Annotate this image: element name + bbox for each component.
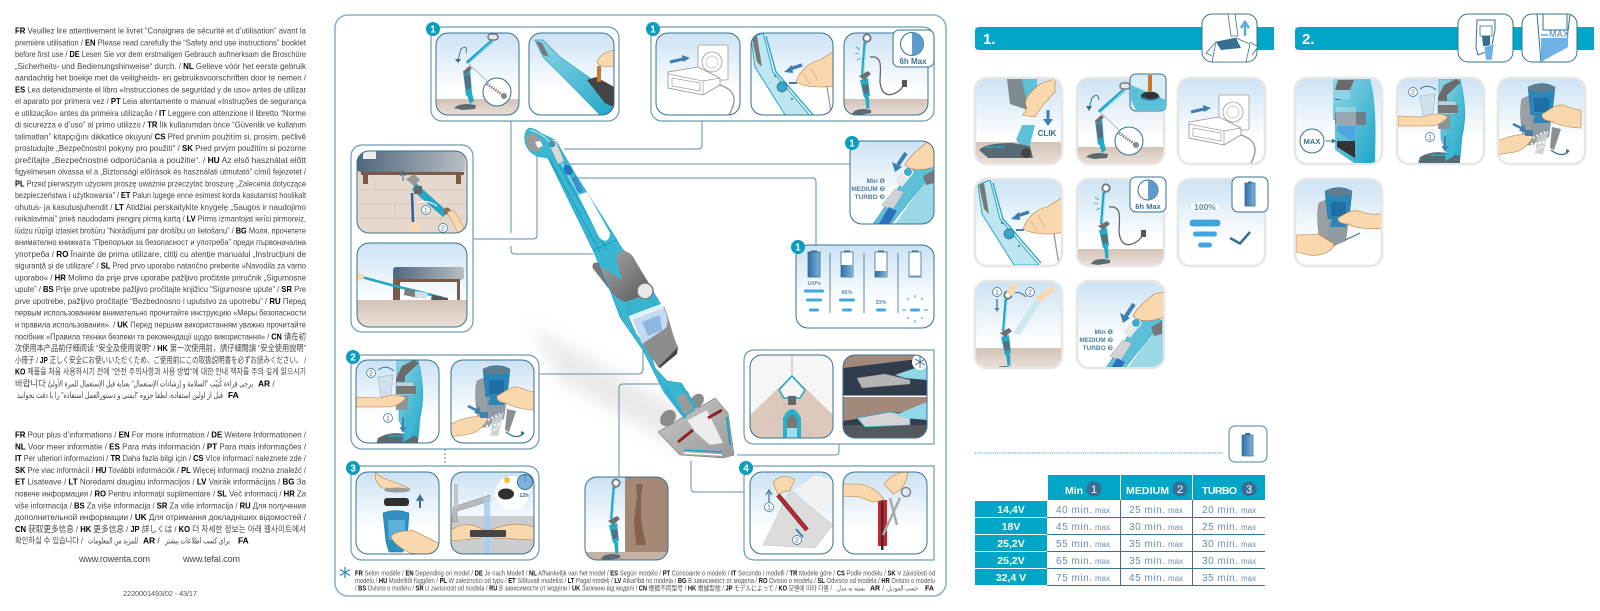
table row labels xyxy=(975,501,1047,585)
table values: max xyxy=(1095,557,1110,566)
left column: safety instructions text block: FA xyxy=(228,390,239,400)
left column: safety instructions text block: aandachtig het boekje met de veiligheids- en gebruiksvoorschriften door te nemen / xyxy=(15,72,307,82)
illustration: remove brush: 2 xyxy=(795,538,799,544)
table values xyxy=(1056,505,1256,584)
left column: safety instructions text block: первым использованием внимательно прочитайте инструкцию «Меры безопасности xyxy=(15,308,306,318)
panel: nozzle corner and furniture xyxy=(744,350,934,444)
step tile: close dust cup xyxy=(1295,179,1382,266)
badge 3 xyxy=(346,461,360,475)
model dependency note: AR / xyxy=(870,586,884,592)
left column: more information text block: 확인하실 수 있습니다 / xyxy=(15,536,84,546)
panel 2: empty dust cup xyxy=(351,355,539,449)
left column: safety instructions text block: siguranță și de utilizare” / SL Pred prvo uporabo natančno preberite »Navodila za varno xyxy=(15,261,306,271)
left column: more information text block: FA xyxy=(238,536,249,546)
battery empty xyxy=(902,250,928,323)
website addresses: www.tefal.com xyxy=(182,554,240,564)
step tile: fold down handle xyxy=(975,281,1062,372)
table grid xyxy=(1047,500,1265,586)
badge 1: 1 xyxy=(430,24,436,36)
model dependency note: / BS Ovisno o modelu / SR U zavisnosti od modela / RU В зависимости от модели / UK Залежно від моделі / CN 根据不同型号 / HK 根據型號 / JP モデルによって / KO 모델에 따라 다름 / xyxy=(355,584,832,592)
grip hole xyxy=(526,132,542,152)
table values: 35 min. xyxy=(1129,556,1165,567)
badge 2: 2 xyxy=(350,352,356,364)
panel 1: fold handle and screw xyxy=(431,27,619,121)
step tile: empty debris xyxy=(1496,78,1585,164)
step tile: max dust level: MAX xyxy=(1304,137,1320,146)
table values: 30 min. xyxy=(1129,522,1165,533)
left column: more information text block: AR / xyxy=(143,536,160,546)
table values: max xyxy=(1241,506,1256,515)
table values: 30 min. xyxy=(1202,556,1238,567)
left column: safety instructions text block: talimatları” kitapçığını dikkatlice okuyun/ CS Před prvním použitím si, prosím, pečlivě xyxy=(15,131,306,141)
left column: safety instructions text block: reikalavimai” prieš naudodami įrenginį pirmą kartą / LV Pirms izmantojat ierīci pirmoreiz, xyxy=(15,214,306,224)
left column: safety instructions text block: lūdzu rūpīgi izlasiet brošūru “Norādījumi par drošību un lietošanu” / BG Моля, прочетете xyxy=(15,225,306,235)
runtime table xyxy=(975,475,1265,586)
mesh band xyxy=(623,297,661,316)
illustration: top view under bed: 2 xyxy=(441,226,445,232)
badge 1 xyxy=(646,22,660,36)
table values: 30 min. xyxy=(1202,539,1238,550)
left column: safety instructions text block: el aparato por primera vez / PT Leia atentamente o manual «Instruções de segurança xyxy=(15,96,306,106)
model dependency note xyxy=(355,570,935,592)
section 1 header bar: 1. xyxy=(983,31,996,48)
table values: 45 min. xyxy=(1056,522,1092,533)
table values: max xyxy=(1241,574,1256,583)
handle highlights xyxy=(530,130,600,232)
step tile: click nozzle: CLIK xyxy=(1038,129,1057,138)
connector lines xyxy=(473,121,850,492)
left column: more information text block: повече информация / RO Pentru informații suplimentare / SL Več informacij / HR Za xyxy=(15,488,306,498)
badge 1 xyxy=(426,22,440,36)
left column: safety instructions text block: prečítajte „Bezpečnostné odporúčania a použitie“. / HU Az első használat előtt xyxy=(15,155,307,165)
badge 3: 3 xyxy=(350,464,356,474)
section 2 header bar xyxy=(1295,27,1594,50)
panel 1: speed modes xyxy=(850,140,934,224)
illustration: remove brush: 1 xyxy=(767,504,771,512)
illustration: top view under bed: 1 xyxy=(424,208,428,214)
table header: TURBO xyxy=(1202,485,1237,497)
neck fork xyxy=(677,391,694,415)
left column: safety instructions text block: PL Przed pierwszym użyciem proszę uważnie przeczytać broszurę „Zalecenia dotyczące xyxy=(15,178,306,188)
table row labels: 32,4 V xyxy=(996,572,1026,584)
icon: unpack box xyxy=(1202,14,1258,62)
panel: under-bed cleaning xyxy=(350,145,473,332)
panel 4: brush maintenance xyxy=(744,466,934,560)
icon: max fill line: MAX xyxy=(1549,29,1569,39)
left column: safety instructions text block: внимателно книжката “Препоръки за безопасност и употреба” преди първоначална xyxy=(15,237,306,247)
inset: screwdriver detail xyxy=(1130,74,1166,111)
icon: 6h max clock xyxy=(893,30,934,67)
table values: max xyxy=(1241,557,1256,566)
illustration: remove filter from cup xyxy=(356,472,440,556)
table values: max xyxy=(1168,506,1183,515)
badge 4 xyxy=(739,461,753,475)
table values: max xyxy=(1168,540,1183,549)
illustration: cut hair with scissors xyxy=(843,472,927,554)
left column: safety instructions text block: upute” / BS Prije prve upotrebe pažljivo pročitajte knjižicu “Sigurnosne upute” / SR Pre xyxy=(15,284,306,294)
icon: model note asterisk xyxy=(340,567,350,578)
step tile: full charge indicator xyxy=(1178,179,1265,266)
icon: 6h max clock xyxy=(1130,177,1166,212)
table values: max xyxy=(1168,574,1183,583)
table values: 25 min. xyxy=(1129,505,1165,516)
connector: dotted link between steps 2 and 3 xyxy=(444,449,446,466)
panel 3: wash filter xyxy=(351,466,539,560)
icon: 6h max clock: 6h Max xyxy=(1135,202,1162,211)
left column: more information text block: برای کسب اطلاعات بیشتر xyxy=(164,536,230,546)
left column: safety instructions text block: di sicurezza e d’uso” al primo utilizzo / TR İlk kullanımdan önce “Güvenlik ve kullanım xyxy=(15,120,306,130)
illustration: nozzle under furniture xyxy=(843,354,928,438)
illustration: nozzle in the corner xyxy=(750,355,833,438)
badge 1: 1 xyxy=(795,242,801,254)
document code: 2220001493/02 - 43/17 xyxy=(123,589,197,598)
step tile: fold down handle: 2 xyxy=(1028,290,1032,296)
table header: 2 xyxy=(1177,484,1183,496)
left column: safety instructions text block: 小冊子 / JP 正しく安全にお使いいただくため、ご使用前にこの取扱説明書を必ずお読みください。 / xyxy=(15,355,307,365)
illustration: top view under bed xyxy=(357,151,467,233)
table header: 3 xyxy=(1246,484,1252,496)
table header: Min xyxy=(1065,485,1083,497)
badge 1: 1 xyxy=(849,138,855,150)
table values: 75 min. xyxy=(1056,573,1092,584)
left column: more information text block: дополнительной информации / UK Для отримання докладніших відомостей / xyxy=(15,512,307,522)
table values: max xyxy=(1241,540,1256,549)
table values: max xyxy=(1168,523,1183,532)
left column: safety instructions text block: première utilisation / EN Please read carefully the “Safety and use instructions” booklet xyxy=(15,37,307,47)
table values: max xyxy=(1095,540,1110,549)
table values: max xyxy=(1168,557,1183,566)
model dependency note: بسته به مدل xyxy=(837,586,865,592)
badge 1 xyxy=(845,136,859,150)
table header: 1 xyxy=(1091,484,1097,496)
left column: safety instructions text block xyxy=(15,26,307,400)
left column: safety instructions text block: AR / xyxy=(258,378,275,388)
left column: safety instructions text block: figyelmesen olvassa el a „Biztonsági előírások és használati útmutató” című fejezetet / xyxy=(15,167,307,177)
control panel xyxy=(548,139,564,164)
table values: max xyxy=(1095,523,1110,532)
left column: safety instructions text block: „Sicherheits- und Bedienungshinweise“ durch. / NL Gelieve vóór het eerste gebruik xyxy=(15,61,307,71)
step tile: plug charger xyxy=(1178,78,1265,168)
table values: max xyxy=(1095,574,1110,583)
badge 2 xyxy=(346,350,360,364)
carry handle behind body xyxy=(593,263,625,302)
table header: MEDIUM xyxy=(1126,485,1169,497)
main vacuum cleaner illustration xyxy=(525,128,734,458)
dotted divider with battery icon xyxy=(975,426,1267,462)
panel 1: battery levels xyxy=(796,245,934,328)
nozzle xyxy=(657,407,679,429)
table values: 45 min. xyxy=(1129,573,1165,584)
section 1 header bar xyxy=(975,27,1274,50)
left column: safety instructions text block: ES Lea detenidamente el libro «Instrucciones de seguridad y de uso» antes de utilizar xyxy=(15,84,306,94)
left column: more information text block xyxy=(15,430,307,546)
left column: safety instructions text block: употреба / RO Înainte de prima utilizare, citiți cu atenție manualul „Instrucțiuni de xyxy=(15,249,306,259)
illustration: charger into socket xyxy=(656,33,740,118)
illustration: empty debris xyxy=(451,360,536,443)
left column: safety instructions text block: e utilização» antes da primeira utilização / IT Leggere con attenzione il libretto “Norme xyxy=(15,108,306,118)
illustration: side view under bed xyxy=(350,243,467,327)
step tile: fold down handle: 1 xyxy=(995,290,999,296)
left column: safety instructions text block: uporabo« / HR Molimo da prije prve uporabe pažljivo pročitate priručnik „Sigurnosne xyxy=(15,272,306,282)
left column: more information text block: CN 获取更多信息 / HK 更多信息 / JP 詳しくは / KO 더 자세한 정보는 아래 웹사이트에서 xyxy=(15,524,306,534)
website addresses xyxy=(78,554,240,564)
step tile: full charge indicator: 100% xyxy=(1194,202,1216,212)
panel: vacuum standing against the wall xyxy=(585,477,668,560)
illustration: vacuum charging xyxy=(844,33,928,115)
left column: safety instructions text block: KO 제품을 처음 사용하시기 전에 "안전 주의사항과 사용 방법"에 대한 안내 책자를 주의 깊게 읽으시기 xyxy=(15,366,306,376)
battery 100%: 100% xyxy=(807,281,821,287)
left column: safety instructions text block: قبل از اولین استفاده، لطفا جزوه "ایمنی و دستورالعمل استفاده" را با دقت بخوانید xyxy=(17,390,223,400)
table row labels: 18V xyxy=(1002,521,1020,533)
icon: battery full xyxy=(1232,177,1268,212)
left column: more information text block: SK Pre viac informácií / HU További információk / PL Więcej informacji można znaleźć / xyxy=(15,465,307,475)
left column: more information text block: ET Lisateave / LT Norėdami daugiau informacijos / LV Vairāk informācijas / BG За xyxy=(15,477,306,487)
left column: more information text block: IT Per ulteriori informazioni / TR Daha fazla bilgi için / CS Více informací naleznete zde / xyxy=(15,453,307,463)
table values: 25 min. xyxy=(1202,522,1238,533)
left column: more information text block: FR Pour plus d’informations / EN For more information / DE Weitere Informationen / xyxy=(15,430,307,440)
table row labels: 25,2V xyxy=(997,555,1025,567)
panel 1: charging xyxy=(651,27,934,121)
left column: safety instructions text block: 바랍니다 / xyxy=(15,378,51,388)
badge 1: 1 xyxy=(650,24,656,36)
illustration: screw the handle xyxy=(436,33,519,115)
illustration: rinse filter under tap and dry xyxy=(451,472,534,554)
battery 66%: 66% xyxy=(841,290,853,296)
icon: dust cup max level xyxy=(1458,14,1513,62)
left column: safety instructions text block: prve upotrebe, pažljivo pročitajte “Bezbednosno i uputstvo za upotrebu” / RU Перед xyxy=(15,296,306,306)
dust cup xyxy=(640,306,678,367)
step tile: plug into handle xyxy=(975,179,1063,266)
left column: safety instructions text block: ohutus- ja kasutusjuhendit / LT Atidžiai perskaitykite knygelę „Saugos ir naudojimo xyxy=(15,202,306,212)
table values: 55 min. xyxy=(1056,539,1092,550)
white handle window xyxy=(578,192,610,241)
table row labels: 25,2V xyxy=(997,538,1025,550)
left column: safety instructions text block: FR Veuillez lire attentivement le livret “Consignes de sécurité et d’utilisation” avant la xyxy=(15,26,306,36)
model dependency note: FR Selon modèle / EN Depending on model / DE Je nach Modell / NL Afhankelijk van het model / ES Según modelo / PT Consoante o modelo / IT Secondo i modelli / TR Modele göre / CS Podle modelu / SK V závislosti od xyxy=(355,570,935,578)
table row labels: 14,4V xyxy=(997,504,1025,516)
step tile: remove dust cup xyxy=(1397,78,1484,164)
battery 33%: 33% xyxy=(875,300,887,306)
illustration: tighten with screwdriver xyxy=(529,33,616,118)
left column: safety instructions text block: prostudujte „Bezpečnostní pokyny pro použití“ / SK Pred prvým použitím si pozorne xyxy=(15,143,306,153)
step tile: charge vacuum xyxy=(1077,179,1164,266)
step tile: max dust level xyxy=(1295,78,1382,164)
icon: 6h max clock: 6h Max xyxy=(899,57,927,66)
left column: safety instructions text block: 次使用本产品前仔细阅读 “安全及使用说明” / HK 第一次使用前，請仔細閱讀 “安全使用說明” xyxy=(15,343,306,353)
motor housing xyxy=(600,251,653,302)
main frame xyxy=(335,15,946,596)
illustration: rinse filter under tap and dry: 12h xyxy=(519,493,529,499)
table values: max xyxy=(1241,523,1256,532)
icon: max fill line xyxy=(1522,14,1577,62)
step tile: speed modes xyxy=(1076,280,1166,370)
section 2 header bar: 2. xyxy=(1302,31,1315,48)
model dependency note: modelu / HU Modelltől függően / PL W zależności od typu / ET Sõltuvalt mudelist / LT Pagal modelį / LV Atkarībā no modeļa / BG В зависимост от модела / RO Ovisno o modelu / SL Odvisno od modela / HR Ovisno o modelu xyxy=(355,578,935,585)
step tile: fold handle and screw xyxy=(1077,78,1164,164)
model dependency note: حسب الموديل xyxy=(887,586,918,592)
table values: 40 min. xyxy=(1056,505,1092,516)
illustration: remove cup xyxy=(356,360,439,445)
table header xyxy=(1048,475,1265,500)
left column: more information text block: NL Voor meer informatie / ES Para más información / PT Para mais informações / xyxy=(15,441,307,451)
table values: 35 min. xyxy=(1202,573,1238,584)
badge 1 xyxy=(791,240,805,254)
handle and body shell xyxy=(525,128,697,418)
floor shadow xyxy=(530,325,700,455)
left column: safety instructions text block: и правила использования». / UK Перед першим використанням уважно прочитайте xyxy=(15,320,306,330)
table values: 65 min. xyxy=(1056,556,1092,567)
left column: safety instructions text block: посібник «Правила техніки безпеки та рекомендації щодо використання» / CN 请在初 xyxy=(15,331,306,341)
model dependency note: FA xyxy=(925,586,934,592)
illustration: remove brush xyxy=(750,472,833,554)
left column: more information text block: više informacija / BS Za više informacija / SR Za više informacija / RU Для получения xyxy=(15,500,306,510)
illustration: plug into the handle xyxy=(751,33,836,118)
left column: safety instructions text block: يرجى قراءة كُتيّب "السلامة و إرشادات الإستعمال" بعناية قبل الإستعمال للمرة الأولى xyxy=(48,377,253,389)
table values: 35 min. xyxy=(1129,539,1165,550)
table values: 20 min. xyxy=(1202,505,1238,516)
table values: max xyxy=(1095,506,1110,515)
step tile: click nozzle xyxy=(975,78,1062,164)
left column: more information text block: للمزيد من المعلومات xyxy=(88,536,138,546)
left column: safety instructions text block: before first use / DE Lesen Sie vor dem erstmaligen Gebrauch aufmerksam die Broschüre xyxy=(15,49,306,59)
left column: safety instructions text block: bezpieczeństwa i użytkowania” / ET Palun lugege enne esimest korda kasutamist hoolikalt xyxy=(15,190,307,200)
badge 4: 4 xyxy=(743,464,749,474)
website addresses: www.rowenta.com xyxy=(78,554,150,564)
